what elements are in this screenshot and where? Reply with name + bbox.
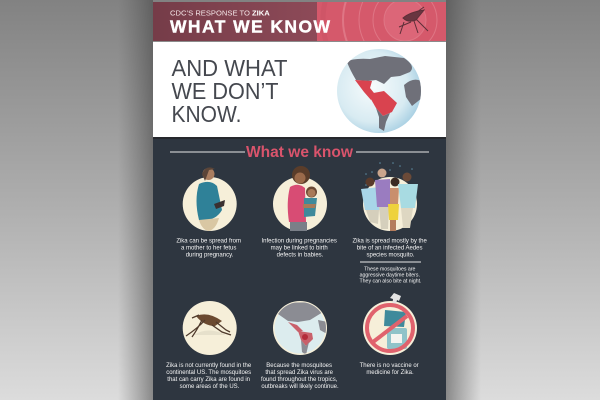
icon: group of people (361, 162, 418, 231)
intro heading (172, 55, 288, 127)
text: found throughout the tropics, (261, 377, 338, 383)
item: pregnant woman (176, 167, 243, 258)
text: some areas of the US. (180, 384, 240, 390)
intro heading: KNOW. (172, 101, 242, 127)
text: medicine for Zika. (366, 370, 414, 376)
intro heading: AND WHAT (172, 55, 288, 81)
icon: globe map (337, 49, 423, 133)
panel: white intro band (153, 42, 446, 137)
item: globe spread (261, 301, 339, 390)
text: Infection during pregnancies (261, 238, 337, 244)
text: defects in babies. (277, 252, 324, 258)
note: They can also bite at night. (360, 278, 422, 284)
text: There is no vaccine or (360, 363, 419, 369)
icon: mother and child (273, 166, 327, 231)
text: outbreaks will likely continue. (261, 384, 339, 390)
text: a mother to her fetus (181, 246, 236, 252)
panel: what we know (153, 137, 446, 400)
text: bite of an infected Aedes (357, 246, 423, 252)
icon: mosquito in header (399, 7, 428, 34)
text: may be linked to birth (271, 246, 328, 252)
icon: no vaccine (363, 293, 417, 355)
text: continental US. The mosquitoes (166, 370, 251, 376)
item: group of people (352, 162, 429, 284)
text: that can carry Zika are found in (167, 377, 250, 383)
section heading with rules: What we know (246, 144, 354, 161)
header title: WHAT WE KNOW (170, 16, 330, 36)
subtitle text: CDC’S RESPONSE TO ZIKA (170, 8, 270, 18)
note: These mosquitoes are (364, 266, 416, 272)
text: species mosquito. (366, 252, 415, 258)
text: Because the mosquitoes (266, 363, 332, 369)
intro heading: WE DON’T (172, 78, 278, 104)
item: mother and child (261, 166, 339, 258)
item: mosquito (166, 301, 253, 390)
text: during pregnancy. (186, 252, 234, 258)
icon: pregnant woman (183, 167, 237, 231)
icon: small globe (273, 301, 328, 355)
note: aggressive daytime biters. (360, 272, 420, 278)
text: Zika can be spread from (176, 238, 241, 244)
item: no vaccine (360, 293, 420, 376)
panel: header banner (153, 2, 446, 41)
icon: mosquito (183, 301, 237, 355)
text: Zika is spread mostly by the (352, 238, 428, 244)
text: that spread Zika virus are (265, 370, 334, 376)
text: Zika is not currently found in the (166, 363, 252, 369)
